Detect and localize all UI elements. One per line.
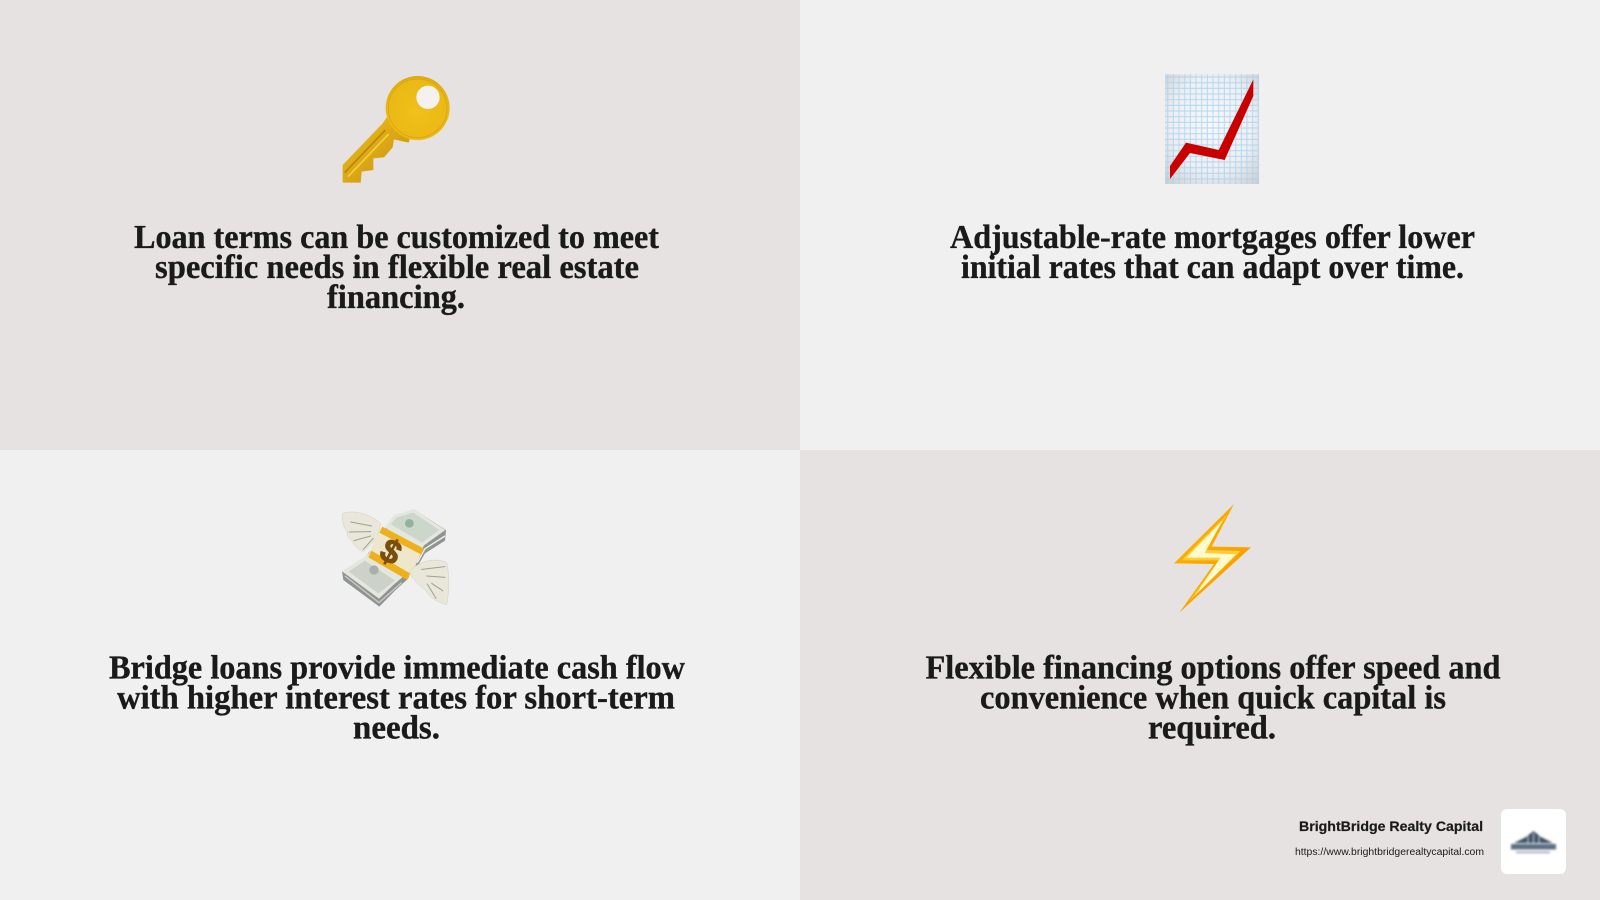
right wing xyxy=(409,560,449,605)
heading: adjustable-rate mortgages: initial rates that can adapt over time. xyxy=(961,249,1464,286)
left wing xyxy=(342,512,381,552)
heading: bridge loans: Bridge loans provide immediate cash flow xyxy=(109,650,685,686)
icon: chart with upward trend xyxy=(1165,74,1259,184)
panel: adjustable-rate mortgages xyxy=(800,0,1600,450)
panel: loan terms xyxy=(0,0,800,450)
heading: bridge loans: needs. xyxy=(353,710,440,746)
heading: bridge loans: with higher interest rates for short-term xyxy=(117,680,675,716)
heading: speed and convenience xyxy=(926,650,1501,746)
logo xyxy=(1501,809,1566,874)
dollar sign: $ xyxy=(374,532,408,573)
panel: speed and convenience xyxy=(800,450,1600,900)
panel: bridge loans xyxy=(0,450,800,900)
heading: speed and convenience: convenience when quick capital is xyxy=(980,680,1446,716)
heading: loan terms: financing. xyxy=(327,279,465,316)
heading: adjustable-rate mortgages: Adjustable-rate mortgages offer lower xyxy=(950,219,1475,256)
heading: bridge loans xyxy=(109,650,685,746)
heading: speed and convenience: Flexible financing options offer speed and xyxy=(926,650,1501,686)
bill stack xyxy=(342,509,446,607)
icon: lightning bolt xyxy=(1174,504,1251,613)
heading: adjustable-rate mortgages xyxy=(950,219,1475,286)
icon: key xyxy=(343,76,450,183)
heading: speed and convenience: required. xyxy=(1148,710,1276,746)
icon: money with wings xyxy=(342,509,449,607)
heading: loan terms xyxy=(134,219,660,316)
heading: loan terms: specific needs in flexible real estate xyxy=(155,249,639,286)
heading: loan terms: Loan terms can be customized to meet xyxy=(134,219,660,256)
wrap band xyxy=(368,528,423,577)
brand name: BrightBridge Realty Capital xyxy=(1299,818,1483,834)
brand url: https://www.brightbridgerealtycapital.com xyxy=(1295,847,1484,858)
